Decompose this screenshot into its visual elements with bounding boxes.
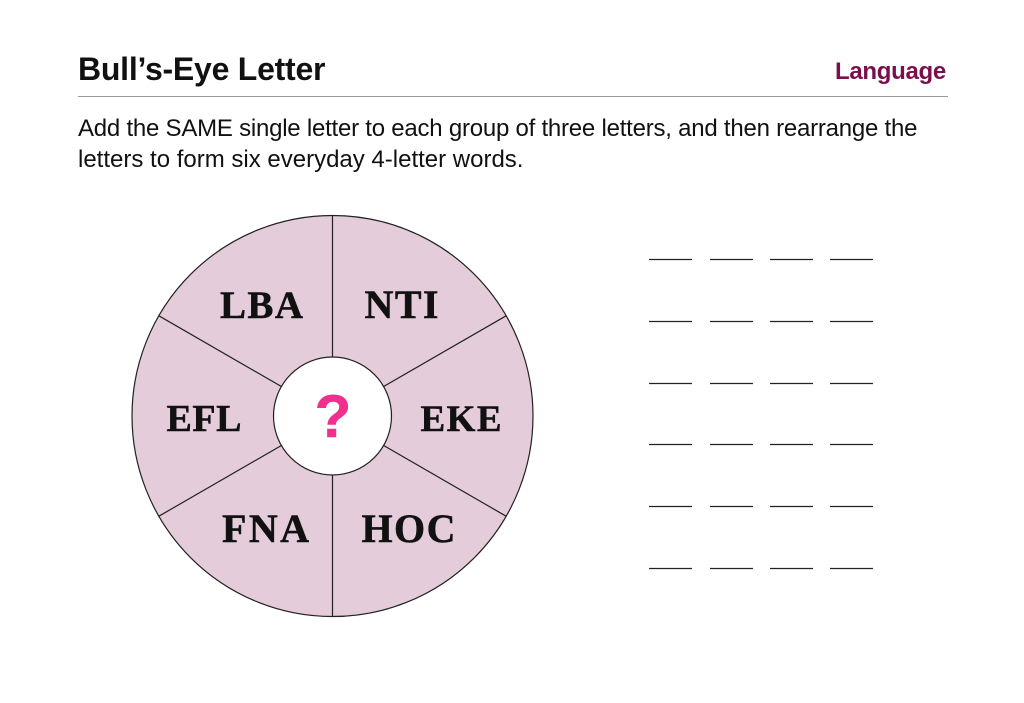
center question mark: ? [315, 383, 351, 450]
segment letters: LBA [220, 284, 303, 327]
segment letters [166, 282, 502, 551]
segment letters: EFL [166, 398, 242, 440]
segment letters: NTI [364, 282, 438, 327]
category label: Language [835, 58, 946, 85]
instructions: Add the SAME single letter to each group of three letters, and then rearrange the [78, 115, 917, 142]
bull's-eye wheel [132, 216, 533, 616]
answer lines [649, 260, 873, 568]
segment letters: HOC [362, 506, 456, 551]
segment letters: FNA [222, 506, 309, 551]
title: Bull’s-Eye Letter [78, 51, 325, 87]
instructions: letters to form six everyday 4-letter words. [78, 146, 523, 173]
segment letters: EKE [420, 399, 502, 440]
instructions [78, 115, 917, 173]
